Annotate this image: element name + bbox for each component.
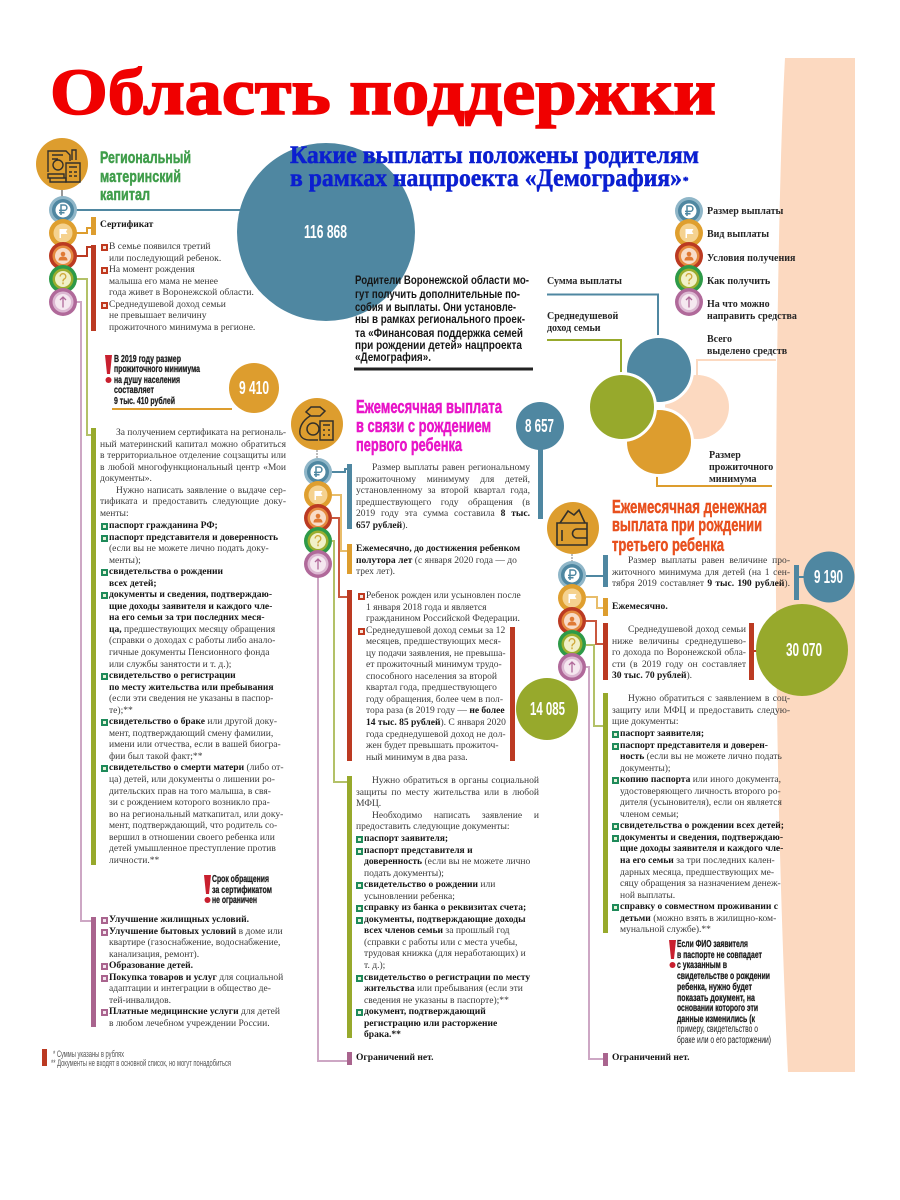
subtitle xyxy=(290,142,699,192)
col 3: documents list: документы); xyxy=(620,763,671,774)
big circle: 116 868 xyxy=(237,143,415,321)
flower label: subsistence minimum: минимума xyxy=(709,474,757,485)
flower label: subsistence minimum: Размер xyxy=(709,450,741,461)
col 1: documents list: свидетельство о регистрации xyxy=(109,670,236,681)
col 2: how to apply xyxy=(356,775,539,832)
alert: name mismatch: примеру, свидетельство о xyxy=(677,1024,758,1035)
col 2: documents list: документ, подтверждающий xyxy=(364,1006,486,1017)
col 1: documents list: детей умышленное преступление против xyxy=(109,843,276,854)
col 1: use of funds list: квартире (газоснабжение, водоснабжение, xyxy=(109,937,280,948)
col 2: conditions: 1 января 2018 года и является xyxy=(366,602,487,613)
col 3: documents list xyxy=(612,728,784,935)
col 3: how to apply: Нужно обратиться с заявлением в соц- xyxy=(628,693,790,704)
col 2: documents list: сведения не указаны в паспорте);** xyxy=(364,995,509,1006)
col 3: documents list: паспорт заявителя; xyxy=(620,728,704,739)
col 2: payment type: трех лет). xyxy=(356,566,395,577)
alert: name mismatch: ребенка, нужно будет xyxy=(677,981,752,993)
col 1: documents list: свидетельство о смерти матери (либо от- xyxy=(109,762,284,773)
value circle: 9 410 xyxy=(112,363,279,413)
alert: name mismatch: в паспорте не совпадает xyxy=(677,950,762,961)
flower label: average income: доход семьи xyxy=(547,323,601,334)
col 2: documents list: усыновлении ребенка; xyxy=(364,891,455,902)
col 1: how to apply: в любой многофункциональный центр «Мои xyxy=(100,462,286,473)
col 2: payment size: установленному за второй квартал года, xyxy=(356,485,530,496)
col 1: documents list: свидетельства о рождении xyxy=(109,566,223,577)
col 2: how to apply: МФЦ. xyxy=(356,798,381,809)
col 2: conditions: гражданином Российской Федерации. xyxy=(366,613,520,624)
value circle: 9 410: 9 410 xyxy=(239,378,269,398)
subtitle: Какие выплаты положены родителям xyxy=(290,142,699,169)
col 1: use of funds list: Улучшение жилищных условий. xyxy=(109,914,249,925)
intro paragraph: «Демография». xyxy=(355,352,431,364)
alert: 2019 minimum: прожиточного минимума xyxy=(114,364,200,375)
col 1: conditions list: прожиточного минимума в регионе. xyxy=(109,322,255,333)
intro paragraph: Родители Воронежской области мо- xyxy=(355,275,529,287)
col 2: payment size: прожиточному минимуму для детей, xyxy=(356,474,530,485)
subtitle: в рамках нацпроекта «Демография» xyxy=(290,165,682,192)
column 3 rings xyxy=(558,561,586,681)
alert: 2019 minimum: на душу населения xyxy=(114,375,180,386)
col 1: how to apply: тификата и предоставить следующие доку- xyxy=(100,496,286,507)
background panel: peach strip xyxy=(776,58,855,1072)
heading: third child payment xyxy=(612,497,767,555)
flower label: total funds: выделено средств xyxy=(707,346,787,357)
col 3: documents list: удостоверяющего личность второго ро- xyxy=(620,786,781,797)
col 1: use of funds list: Образование детей. xyxy=(109,960,193,971)
col 2: how to apply: Необходимо написать заявление и xyxy=(372,810,539,821)
alert: application deadline: Срок обращения xyxy=(212,873,269,885)
col 1: documents list: по месту жительства или пребывания xyxy=(109,682,274,693)
col 2: conditions: 14 тыс. 85 рублей). С января 2020 xyxy=(366,717,506,728)
col 1: documents list: всех детей; xyxy=(109,578,157,589)
value circle: 14 085: 14 085 xyxy=(530,699,565,719)
alert: 2019 minimum: составляет xyxy=(114,385,154,396)
col 1: documents list: вершил в отношении своего ребенка или xyxy=(109,832,275,843)
flower label: average income: Среднедушевой xyxy=(547,311,618,322)
col 3: documents list: мунальной службе).** xyxy=(620,924,711,935)
value circle: 8 657: 8 657 xyxy=(525,416,554,436)
col 1: conditions list: или последующий ребенок. xyxy=(109,253,221,264)
col 1: documents list: дительских прав на того малыша, в свя- xyxy=(109,786,271,797)
intro paragraph: гут получить дополнительные по- xyxy=(355,289,520,301)
col 2: conditions: году обращения, более чем в пол- xyxy=(366,694,503,705)
col 2: payment type: полутора лет (с января 2020 года — до xyxy=(356,555,517,566)
subtitle: * xyxy=(683,175,689,187)
col 3: payment size: житочного минимума для детей (на 1 сен- xyxy=(612,567,790,578)
col 3: conditions xyxy=(612,624,746,681)
col 1: documents list: (справки о доходах с работы либо анало- xyxy=(109,635,275,646)
col 1: how to apply: документы». xyxy=(100,473,152,484)
col 1: documents list: мент, подтверждающий смену фамилии, xyxy=(109,728,273,739)
col 2: payment size: 657 рублей). xyxy=(356,520,408,531)
col 1: use of funds list: Покупка товаров и услуг для социальной xyxy=(109,972,283,983)
footnotes: ** Документы не входят в основной список, но могут понадобиться xyxy=(51,1058,231,1068)
col 1: conditions list: малыша его мама не менее xyxy=(109,276,218,287)
col 3: documents list: детьми (можно взять в жилищно-ком- xyxy=(620,913,776,924)
heading: third child payment: третьего ребенка xyxy=(612,535,725,555)
heading: regional capital: материнский xyxy=(100,167,181,186)
alert: name mismatch: данные изменились (к xyxy=(677,1014,756,1025)
heading: regional capital xyxy=(100,148,191,204)
col 2: documents list xyxy=(356,833,530,1040)
flower label: subsistence minimum xyxy=(709,450,773,485)
col 2: how to apply: предоставить следующие документы: xyxy=(356,821,510,832)
col 3: how to apply xyxy=(612,693,790,727)
alert: name mismatch: свидетельстве о рождении xyxy=(677,971,770,982)
col 2: documents list: свидетельство о регистрации по месту xyxy=(364,972,530,983)
heading: first child payment xyxy=(356,397,503,455)
legend label: use of funds xyxy=(707,299,797,322)
col 2: documents list: доверенность (если вы не можете лично xyxy=(364,856,530,867)
col 1: documents list: менты); xyxy=(109,555,141,566)
col 2: documents list: всех членов семьи за прошлый год xyxy=(364,925,510,936)
col 2: funds use: Ограничений нет. xyxy=(356,1052,433,1063)
col 2: documents list: (справки с работы или с места учебы, xyxy=(364,937,517,948)
column 1 connectors and bars xyxy=(76,210,240,1027)
col 2: documents list: подать документы); xyxy=(364,868,444,879)
col 3: funds use: Ограничений нет. xyxy=(612,1052,689,1063)
col 3: documents list: ность (если вы не можете лично подать xyxy=(620,751,782,762)
big circle: 116 868: 116 868 xyxy=(304,222,347,242)
col 3: how to apply: защиту или МФЦ и предоставить следую- xyxy=(612,705,790,716)
col 3: documents list: щие доходы заявителя и каждого чле- xyxy=(620,843,783,854)
heading: first child payment: в связи с рождением xyxy=(356,416,491,436)
col 1: documents list: документы и сведения, подтверждаю- xyxy=(109,589,272,600)
col 2: documents list: справку из банка о реквизитах счета; xyxy=(364,902,526,913)
column 1 rings xyxy=(49,196,77,316)
col 3: payment size: Размер выплаты равен величине про- xyxy=(628,555,790,566)
col 2: documents list: брака.** xyxy=(364,1029,401,1040)
alert: name mismatch: основании которого эти xyxy=(677,1003,758,1014)
col 3: conditions: Среднедушевой доход семьи xyxy=(628,624,746,635)
legend label: use of funds: направить средства xyxy=(707,311,797,322)
col 1: how to apply xyxy=(100,427,286,519)
col 1: use of funds list: канализация, ремонт). xyxy=(109,949,199,960)
heading: third child payment: выплата при рождении xyxy=(612,515,762,535)
col 1: documents list: (если вы не можете лично подать доку- xyxy=(109,543,269,554)
col 2: payment size: предшествующего году обращения (в xyxy=(356,497,530,508)
legend label: conditions: Условия получения xyxy=(707,253,795,264)
col 2: documents list: регистрацию или расторжение xyxy=(364,1018,497,1029)
col 3: documents list: документы и сведения, подтверждаю- xyxy=(620,832,783,843)
col 2: documents list: трудовая книжка (для неработающих) и xyxy=(364,948,526,959)
col 1: documents list: зи с рождением которого возникло пра- xyxy=(109,797,270,808)
col 2: documents list: свидетельство о рождении или xyxy=(364,879,495,890)
legend label: use of funds: На что можно xyxy=(707,299,770,310)
col 3: documents list: копию паспорта или иного документа, xyxy=(620,774,781,785)
alert: 2019 minimum xyxy=(105,354,200,407)
intro paragraph: при рождении детей» нацпроекта xyxy=(355,340,523,352)
column 2 rings xyxy=(304,458,332,578)
alert: name mismatch xyxy=(669,939,771,1046)
value circle: 9 190: 9 190 xyxy=(814,567,843,587)
alert: application deadline: за сертификатом xyxy=(212,884,272,896)
col 1: documents list: на его семьи за три последних меся- xyxy=(109,612,265,623)
footnotes xyxy=(42,1049,231,1068)
col 2: conditions: ный минимум в два раза. xyxy=(366,752,468,763)
alert: name mismatch: браке или о его расторжении) xyxy=(677,1034,771,1046)
col 2: conditions: ет прожиточный минимум трудо- xyxy=(366,659,502,670)
col 2: conditions: жен будет превышать прожиточ- xyxy=(366,740,498,751)
col 1: use of funds list xyxy=(101,914,283,1029)
value circle: 9 190 xyxy=(804,552,854,602)
col 1: conditions list: На момент рождения xyxy=(109,264,195,275)
col 3: documents list: на его семьи за три последних кален- xyxy=(620,855,775,866)
col 3: documents list: ной выплаты. xyxy=(620,890,675,901)
intro paragraph: собия и выплаты. Они установле- xyxy=(355,302,516,314)
col 1: documents list: (если эти сведения не указаны в паспор- xyxy=(109,693,273,704)
column 3 connectors and bars xyxy=(586,555,806,1066)
flower diagram xyxy=(547,294,776,486)
col 1: documents list: паспорт гражданина РФ; xyxy=(109,520,218,531)
legend label: how to get: Как получить xyxy=(707,276,770,287)
intro paragraph: ны в рамках регионального проек- xyxy=(355,314,525,326)
footnotes: * Суммы указаны в рублях xyxy=(53,1049,124,1059)
col 2: documents list: документы, подтверждающие доходы xyxy=(364,914,526,925)
col 3: documents list: сяцу обращения за назначением денеж- xyxy=(620,878,781,889)
col 2: payment type: Ежемесячно, до достижения ребенком xyxy=(356,543,520,554)
col 1: conditions list xyxy=(101,241,255,333)
col 3: conditions: ниже величины среднедушево- xyxy=(612,636,746,647)
col 1: documents list: ца) детей, или документы о лишении ро- xyxy=(109,774,275,785)
col 3: payment type: Ежемесячно. xyxy=(612,601,668,612)
col 1: how to apply: в территориальное отделение соцзащиты или xyxy=(100,450,286,461)
heading: first child payment: Ежемесячная выплата xyxy=(356,397,503,417)
col 1: documents list: фии был такой факт;** xyxy=(109,751,202,762)
col 2: payment size xyxy=(356,462,530,531)
col 1: documents list: свидетельство о браке или другой доку- xyxy=(109,716,277,727)
alert: name mismatch: показать документ, на xyxy=(677,993,755,1004)
col 1: documents list: или службы занятости и т. д.); xyxy=(109,659,231,670)
col 2: conditions: тора раза (в 2019 году — не более xyxy=(366,705,505,716)
col 1: documents list: ца, предшествующих месяцу обращения xyxy=(109,624,275,635)
col 1: type: Сертификат xyxy=(100,219,153,230)
icon: wallet xyxy=(547,502,599,562)
col 1: conditions list: не превышает величину xyxy=(109,310,207,321)
col 1: documents list: гичные документы Пенсионного фонда xyxy=(109,647,269,658)
col 2: payment size: Размер выплаты равен региональному xyxy=(372,462,530,473)
col 2: how to apply: Нужно обратиться в органы социальной xyxy=(372,775,539,786)
col 1: documents list: имени или отчества, если в вашей биогра- xyxy=(109,739,281,750)
col 3: conditions: 30 тыс. 70 рублей). xyxy=(612,670,692,681)
alert: application deadline xyxy=(204,873,272,906)
alert: name mismatch: Если ФИО заявителя xyxy=(677,939,748,950)
col 1: use of funds list: адаптации и интеграции в общество де- xyxy=(109,983,271,994)
col 3: conditions: сти (в 2019 году он составляет xyxy=(612,659,746,670)
heading: third child payment: Ежемесячная денежная xyxy=(612,497,767,517)
col 3: documents list: паспорт представителя и доверен- xyxy=(620,740,768,751)
col 3: documents list: членом семьи; xyxy=(620,809,679,820)
col 3: conditions: го дохода по Воронежской обла- xyxy=(612,647,746,658)
flower label: total funds xyxy=(707,334,787,357)
col 2: payment size: 2019 году эта сумма составила 8 тыс. xyxy=(356,508,530,519)
col 3: documents list: дарных месяца, предшествующих ме- xyxy=(620,867,774,878)
col 3: documents list: справку о совместном проживании с xyxy=(620,901,778,912)
col 2: conditions: года среднедушевой доход не дол- xyxy=(366,729,506,740)
col 1: documents list: те);** xyxy=(109,705,133,716)
legend label: payment type: Вид выплаты xyxy=(707,229,769,240)
value circle: 30 070: 30 070 xyxy=(786,640,822,660)
flower label: subsistence minimum: прожиточного xyxy=(709,462,773,473)
legend label: payment size: Размер выплаты xyxy=(707,206,783,217)
title: Область поддержки xyxy=(50,56,716,129)
col 3: payment size: тября 2019 составляет 9 тыс. 190 рублей). xyxy=(612,578,790,589)
alert: name mismatch: с указанным в xyxy=(677,960,727,971)
col 3: documents list: свидетельства о рождении всех детей; xyxy=(620,820,784,831)
col 1: use of funds list: Платные медицинские услуги для детей xyxy=(109,1006,280,1017)
col 2: documents list: паспорт представителя и xyxy=(364,845,473,856)
intro paragraph: та «Финансовая поддержка семей xyxy=(355,328,523,340)
col 2: how to apply: защиты по месту жительства или в любой xyxy=(356,787,539,798)
flower label: payment amount: Сумма выплаты xyxy=(547,276,622,287)
col 1: documents list: личности.** xyxy=(109,855,159,866)
value circle: 14 085 xyxy=(516,678,578,740)
col 1: documents list: во на региональный маткапитал, или доку- xyxy=(109,809,283,820)
col 2: documents list: паспорт заявителя; xyxy=(364,833,448,844)
col 1: documents list: мент, подтверждающий, что родитель со- xyxy=(109,820,277,831)
alert: 2019 minimum: В 2019 году размер xyxy=(114,354,181,365)
heading: first child payment: первого ребенка xyxy=(356,435,463,455)
value circle: 30 070 xyxy=(756,604,848,696)
column 2 connectors and bars xyxy=(318,464,515,1065)
col 2: conditions: месяцев, предшествующих меся- xyxy=(366,636,501,647)
col 2: conditions: квартал года, предшествующего xyxy=(366,682,497,693)
value circle: 8 657 xyxy=(516,402,564,519)
col 2: documents list: т. д.); xyxy=(364,960,385,971)
flower label: average income xyxy=(547,311,618,334)
col 2: conditions: способного населения за второй xyxy=(366,671,497,682)
heading: regional capital: Региональный xyxy=(100,148,191,167)
col 1: documents list: паспорт представителя и доверенность xyxy=(109,532,278,543)
col 1: how to apply: ный материнский капитал можно обратиться xyxy=(100,439,286,450)
col 3: payment size xyxy=(612,555,790,589)
col 2: documents list: жительства или пребывания (если эти xyxy=(364,983,523,994)
alert: application deadline: не ограничен xyxy=(212,895,257,906)
col 1: documents list xyxy=(101,520,284,866)
heading: regional capital: капитал xyxy=(100,185,150,204)
legend rings xyxy=(675,197,703,316)
col 3: documents list: дителя (усыновителя), если он является xyxy=(620,797,782,808)
col 2: conditions: Среднедушевой доход семьи за 12 xyxy=(366,625,505,636)
intro paragraph xyxy=(354,275,533,370)
col 1: how to apply: За получением сертификата на региональ- xyxy=(116,427,286,438)
col 1: conditions list: года живет в Воронежской области. xyxy=(109,287,254,298)
col 1: conditions list: В семье появился третий xyxy=(109,241,211,252)
col 2: conditions xyxy=(358,590,521,763)
col 1: use of funds list: Улучшение бытовых условий в доме или xyxy=(109,926,283,937)
alert: 2019 minimum: 9 тыс. 410 рублей xyxy=(114,395,175,407)
icon: money bag xyxy=(291,398,343,458)
col 1: how to apply: Нужно написать заявление о выдаче сер- xyxy=(116,485,286,496)
col 1: how to apply: менты: xyxy=(100,508,129,519)
col 3: how to apply: щие документы: xyxy=(612,716,678,727)
col 1: documents list: щие доходы заявителя и каждого чле- xyxy=(109,601,272,612)
col 2: payment type xyxy=(356,543,520,577)
col 1: use of funds list: в любом лечебном учреждении России. xyxy=(109,1018,270,1029)
col 2: conditions: цу подачи заявления, не превыша- xyxy=(366,648,506,659)
icon: documents and calculator xyxy=(36,138,88,197)
col 2: conditions: Ребенок рожден или усыновлен после xyxy=(366,590,521,601)
flower label: total funds: Всего xyxy=(707,334,732,345)
col 1: use of funds list: тей-инвалидов. xyxy=(109,995,171,1006)
col 1: conditions list: Среднедушевой доход семьи xyxy=(109,299,226,310)
